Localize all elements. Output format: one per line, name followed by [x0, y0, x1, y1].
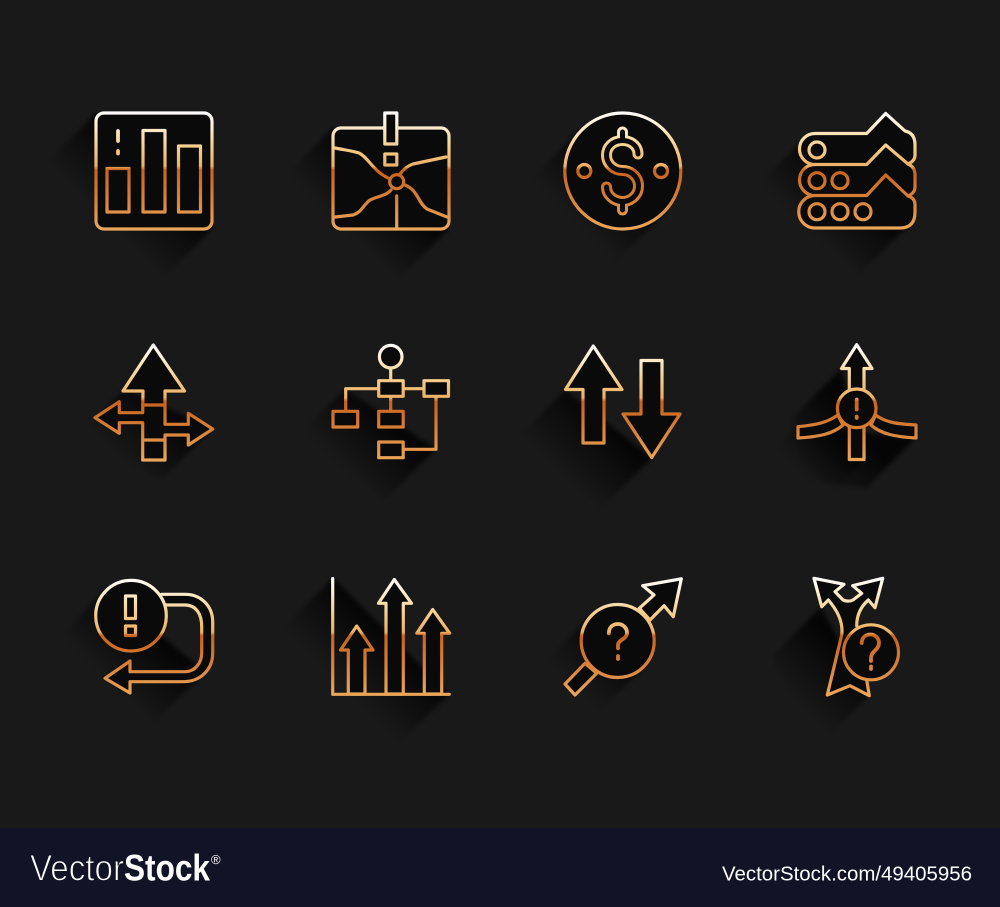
icon: flowchart — [295, 345, 448, 499]
VectorStock logo wordmark: Stock — [124, 848, 210, 888]
icon: warning with return arrow — [56, 580, 213, 722]
icon: bar chart with warning — [46, 113, 212, 279]
icon: road map with warning — [283, 113, 449, 279]
icon: three-way direction arrows — [75, 345, 213, 479]
icon: magnifier with question and arrow — [542, 579, 681, 717]
VectorStock logo wordmark: ® — [211, 852, 221, 867]
icon: forked road with question — [771, 578, 898, 746]
image id url: VectorStock.com/49405956 — [722, 864, 972, 886]
icon: dollar coin — [531, 113, 681, 263]
VectorStock logo wordmark: Vector — [30, 848, 124, 888]
icon: up and down arrows — [515, 346, 680, 508]
icon: road junction with warning — [748, 345, 916, 510]
icon: rising arrows chart — [283, 578, 450, 744]
VectorStock logo wordmark — [30, 848, 221, 888]
icon: server rows with rising chevrons — [754, 114, 915, 274]
footer bar — [0, 828, 1000, 907]
